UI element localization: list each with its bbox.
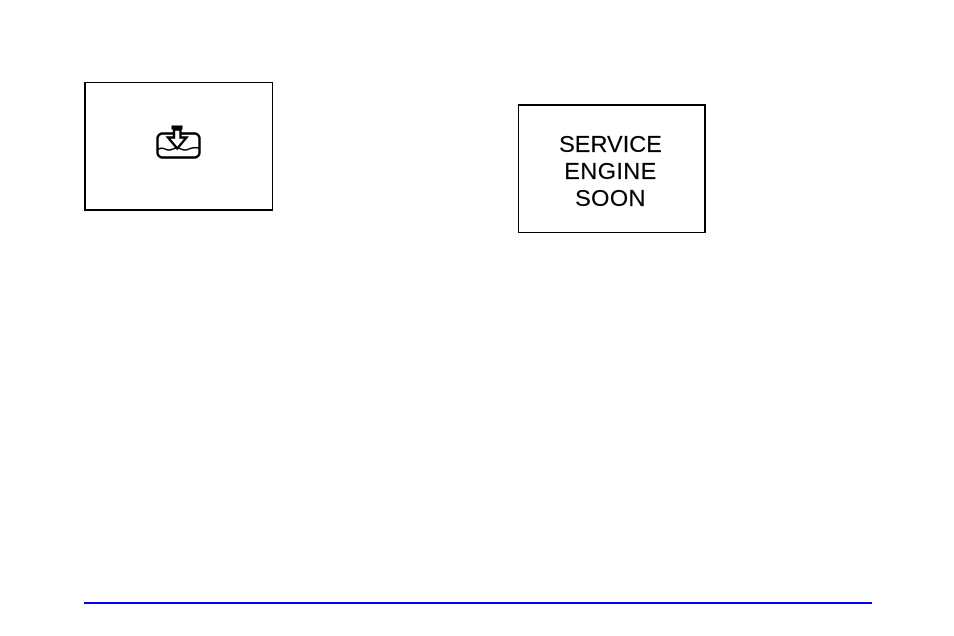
icon: coolant level symbol <box>156 126 201 159</box>
text: service: SERVICE <box>559 131 662 157</box>
text: soon: SOON <box>575 185 646 211</box>
footer rule <box>84 602 872 604</box>
panel: service engine soon warning light <box>518 104 706 233</box>
panel: coolant level warning light <box>84 82 273 211</box>
text: engine: ENGINE <box>564 158 657 184</box>
